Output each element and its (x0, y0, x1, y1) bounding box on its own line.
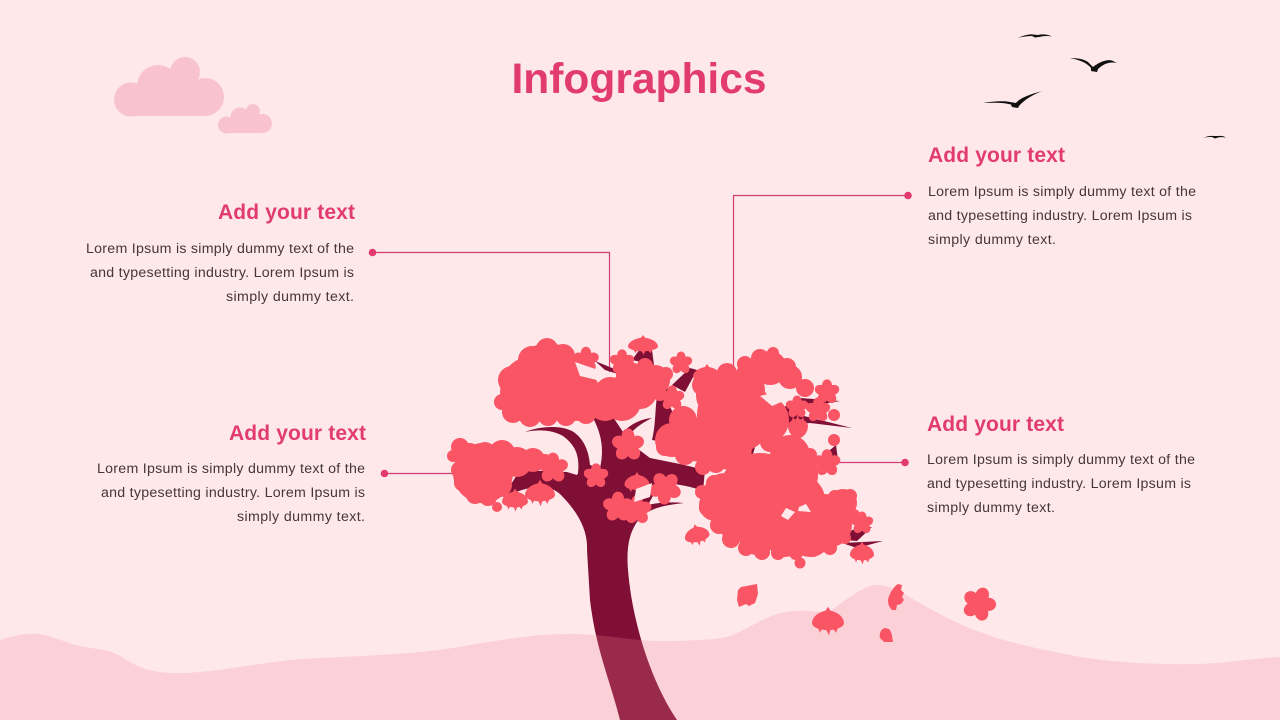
bird: top (1018, 34, 1052, 38)
text block: bottom right: simply dummy text. (927, 500, 1055, 516)
text block: top left: Lorem Ipsum is simply dummy text of the (86, 241, 354, 257)
text block: top left: simply dummy text. (226, 289, 354, 305)
text block: bottom left: Add your text (229, 422, 366, 445)
text block: top left: Add your text (218, 201, 355, 224)
text block: bottom right: Lorem Ipsum is simply dummy text of the (927, 452, 1195, 468)
text block: top right: Add your text (928, 144, 1065, 167)
text block: top left: and typesetting industry. Lorem Ipsum is (90, 265, 354, 281)
gaps in foliage (575, 362, 811, 520)
falling leaves (737, 582, 1002, 642)
trunk and branches (503, 349, 883, 720)
small flowers (492, 335, 874, 568)
connector lines (372, 196, 908, 474)
bird: far right (1203, 136, 1226, 138)
text block: bottom right: Add your text (927, 413, 1064, 436)
hills (0, 585, 1280, 720)
text block: bottom left: simply dummy text. (237, 509, 365, 525)
leaf cluster: centre (655, 347, 814, 475)
text block: bottom left: and typesetting industry. Lorem Ipsum is (101, 485, 365, 501)
text block: top right: Lorem Ipsum is simply dummy text of the (928, 184, 1196, 200)
text block: bottom left: Lorem Ipsum is simply dummy text of the (97, 461, 365, 477)
text block: top left (86, 201, 355, 305)
text block: bottom right: and typesetting industry. Lorem Ipsum is (927, 476, 1191, 492)
connector dots (369, 192, 912, 477)
text block: top right: simply dummy text. (928, 232, 1056, 248)
text block: bottom left (97, 422, 366, 525)
text block: top right (928, 144, 1196, 248)
title: Infographics (512, 56, 766, 103)
leaf cluster: lower right (695, 432, 860, 560)
cloud: large (114, 57, 224, 116)
cloud: small (218, 104, 272, 134)
leaf cluster: left (447, 438, 553, 506)
bird: middle (1070, 58, 1117, 72)
text block: bottom right (927, 413, 1195, 516)
text block: top right: and typesetting industry. Lorem Ipsum is (928, 208, 1192, 224)
tree (447, 335, 883, 720)
bird: lower left (983, 91, 1042, 108)
leaf cluster: upper left (494, 338, 673, 427)
